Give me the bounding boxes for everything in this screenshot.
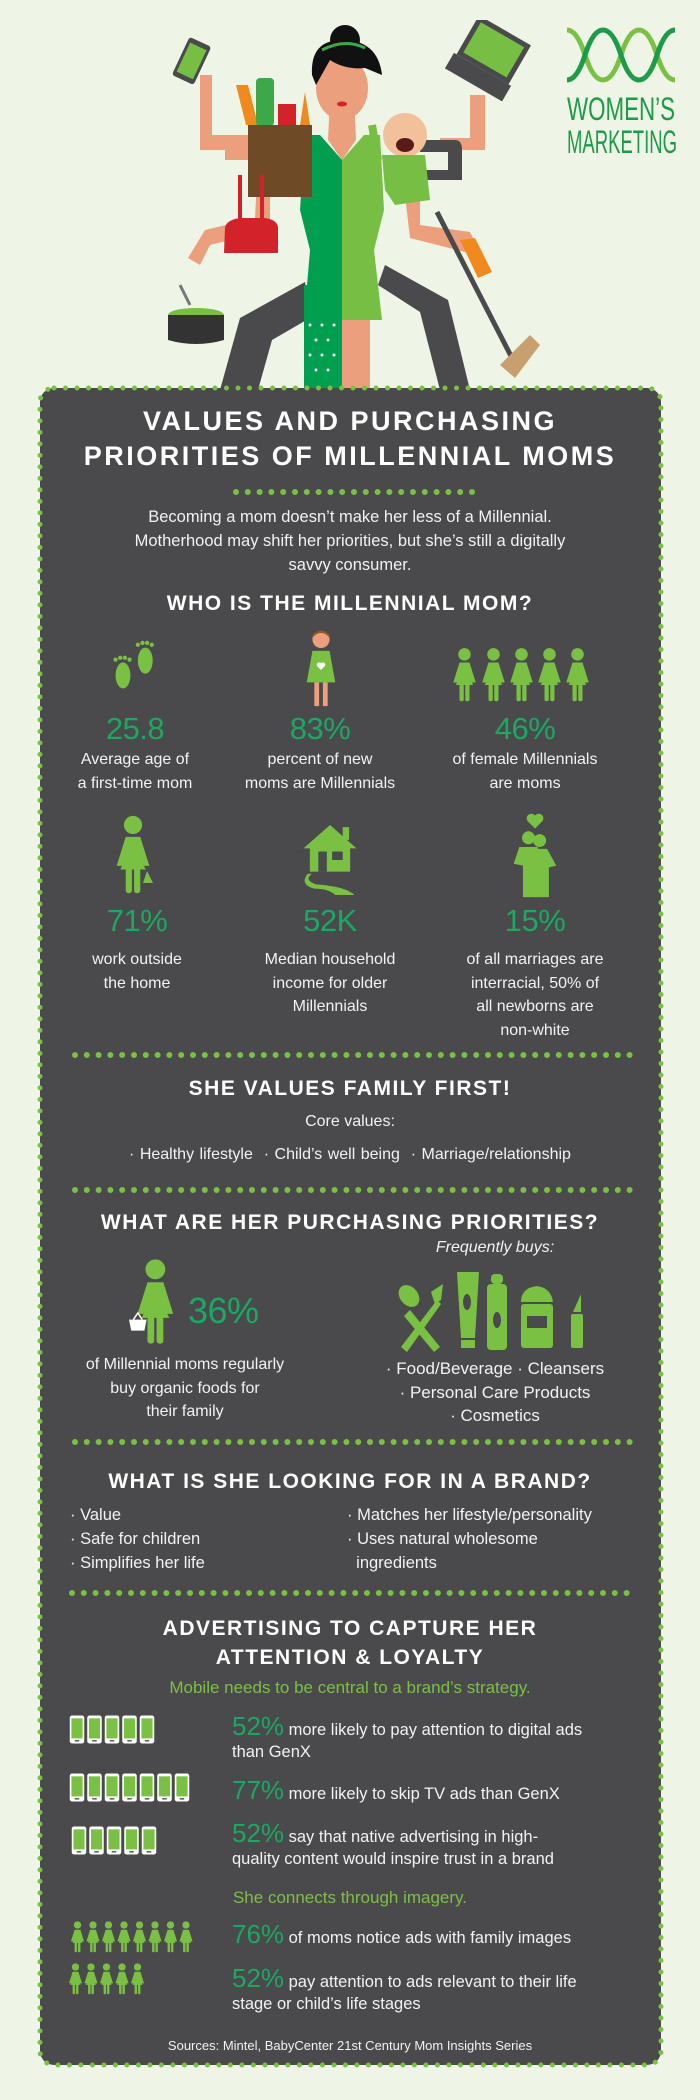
block: 36% organic: their family bbox=[146, 1403, 224, 1420]
sources: Sources: Mintel, BabyCenter 21st Century Mom Insights Series bbox=[168, 2038, 532, 2053]
stat: 15%: non-white bbox=[500, 1022, 570, 1038]
stat: 15%: all newborns are bbox=[476, 998, 594, 1015]
stat: 15%: interracial, 50% of bbox=[471, 974, 599, 992]
list: brand left: · Simplifies her life bbox=[70, 1554, 205, 1572]
stat: 25.8: 25.8 bbox=[106, 711, 164, 746]
heading: brand: WHAT IS SHE LOOKING FOR IN A BRAND? bbox=[108, 1470, 592, 1493]
heading: she values family first: SHE VALUES FAMILY FIRST! bbox=[189, 1077, 511, 1100]
heading: purchasing priorities: WHAT ARE HER PURCHASING PRIORITIES? bbox=[101, 1211, 599, 1234]
block: 36% organic: 36% bbox=[188, 1290, 259, 1331]
heading: advertising: ATTENTION & LOYALTY bbox=[216, 1646, 484, 1669]
stat: 25.8: a first-time mom bbox=[78, 774, 192, 792]
intro text bbox=[135, 508, 566, 574]
stat: 46% bbox=[453, 648, 597, 792]
stat: 71%: work outside bbox=[92, 951, 182, 968]
text: 52% life stage: 52% pay attention to ads relevant to their life bbox=[232, 1963, 577, 1993]
text: 52% native advertising bbox=[232, 1818, 554, 1868]
heading: advertising: ADVERTISING TO CAPTURE HER bbox=[163, 1617, 537, 1640]
text: core values: Core values: bbox=[305, 1113, 395, 1130]
stat: 25.8 bbox=[78, 640, 192, 792]
list: brand left bbox=[70, 1506, 205, 1572]
text: 52% digital ads: than GenX bbox=[232, 1743, 311, 1761]
text: · Healthy lifestyle · Child’s well being · Marriage/relationship bbox=[129, 1146, 571, 1163]
stat: 83%: percent of new bbox=[268, 751, 372, 768]
intro text: Motherhood may shift her priorities, but she’s still a digitally bbox=[135, 532, 565, 550]
text: 76% family images: 76% of moms notice ads with family images bbox=[232, 1919, 571, 1949]
icon: five women bbox=[453, 648, 589, 702]
heading: advertising bbox=[163, 1617, 537, 1669]
icon: house with path bbox=[304, 825, 356, 895]
icons: products bbox=[398, 1272, 583, 1352]
icon: footprints bbox=[113, 640, 154, 688]
subheading: mobile: Mobile needs to be central to a brand’s strategy. bbox=[169, 1678, 531, 1697]
title: VALUES AND PURCHASING bbox=[143, 406, 557, 436]
list: brand right: ingredients bbox=[356, 1554, 437, 1572]
stat: 52K: income for older bbox=[273, 974, 387, 992]
icon: woman with basket bbox=[129, 1259, 174, 1344]
list: brand left: · Safe for children bbox=[70, 1530, 200, 1548]
stat: 71%: the home bbox=[104, 974, 170, 992]
stat: 15%: of all marriages are bbox=[467, 951, 603, 968]
stat: 83%: 83% bbox=[290, 711, 350, 746]
text: 52% native advertising: quality content would inspire trust in a brand bbox=[232, 1850, 554, 1868]
stat: 52K: 52K bbox=[303, 903, 357, 938]
text: 52% native advertising: 52% say that native advertising in high- bbox=[232, 1818, 538, 1848]
stat: 71%: 71% bbox=[107, 903, 167, 938]
block: 36% organic bbox=[86, 1259, 284, 1420]
title: PRIORITIES OF MILLENNIAL MOMS bbox=[84, 441, 616, 471]
icon: 5 phones row 1 bbox=[70, 1716, 154, 1744]
heading: who is the millennial mom: WHO IS THE MILLENNIAL MOM? bbox=[167, 592, 533, 615]
stat: 46%: are moms bbox=[489, 774, 561, 792]
block: frequently buys: · Personal Care Products bbox=[400, 1382, 590, 1402]
list: brand right: · Matches her lifestyle/personality bbox=[347, 1506, 592, 1524]
logo: Women's Marketing bbox=[567, 28, 677, 160]
stat: 15% bbox=[467, 814, 603, 1038]
text: 52% life stage: stage or child’s life stages bbox=[232, 1995, 421, 2013]
stat: 83% bbox=[245, 630, 395, 792]
list: brand right bbox=[347, 1506, 592, 1572]
text: 52% digital ads: 52% more likely to pay attention to digital ads bbox=[232, 1711, 582, 1741]
stat: 52K: Millennials bbox=[293, 998, 367, 1015]
icon: pregnant woman bbox=[306, 630, 336, 706]
stat: 71% bbox=[92, 816, 182, 992]
block: frequently buys: Frequently buys: bbox=[436, 1239, 554, 1256]
stat: 46%: of female Millennials bbox=[453, 751, 597, 768]
title bbox=[84, 406, 616, 471]
text: 52% life stage bbox=[232, 1963, 577, 2013]
stat: 52K bbox=[265, 825, 395, 1015]
stat: 52K: Median household bbox=[265, 951, 395, 968]
list: brand right: · Uses natural wholesome bbox=[347, 1530, 538, 1548]
text: 77% skip TV: 77% more likely to skip TV ads than GenX bbox=[232, 1775, 560, 1805]
block: frequently buys: · Cosmetics bbox=[450, 1406, 540, 1425]
list: brand left: · Value bbox=[70, 1506, 121, 1524]
icon: 5 phones row 3 bbox=[72, 1826, 156, 1854]
stat: 46%: 46% bbox=[495, 711, 555, 746]
subheading: imagery: She connects through imagery. bbox=[233, 1888, 467, 1907]
icon: couple with heart bbox=[514, 814, 556, 898]
block: frequently buys: · Food/Beverage · Cleansers bbox=[386, 1359, 604, 1378]
icon: 8 women bbox=[71, 1921, 192, 1952]
illustration: multitasking mom bbox=[168, 20, 540, 388]
intro text: savvy consumer. bbox=[289, 556, 411, 574]
block: frequently buys bbox=[386, 1239, 604, 1425]
icon: 7 phones bbox=[70, 1774, 190, 1802]
block: 36% organic: of Millennial moms regularly bbox=[86, 1356, 284, 1373]
stat: 83%: moms are Millennials bbox=[245, 774, 395, 792]
icon: 5 women bbox=[69, 1963, 144, 1994]
intro text: Becoming a mom doesn’t make her less of a Millennial. bbox=[148, 508, 552, 526]
stat: 25.8: Average age of bbox=[81, 751, 189, 768]
icon: woman with bag bbox=[116, 816, 153, 894]
text: 52% digital ads bbox=[232, 1711, 582, 1761]
stat: 15%: 15% bbox=[505, 903, 565, 938]
block: 36% organic: buy organic foods for bbox=[110, 1380, 260, 1396]
